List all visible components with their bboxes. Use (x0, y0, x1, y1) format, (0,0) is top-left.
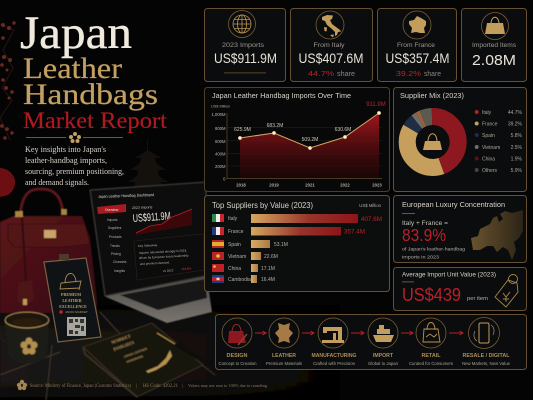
bar values: 16.4M (261, 277, 275, 283)
legend: Italy (482, 110, 492, 116)
legend: 44.7% (508, 110, 523, 116)
supplier names: France (228, 229, 244, 235)
title: Leather (23, 52, 122, 85)
intro text: sourcing, premium positioning, (25, 167, 124, 176)
laptop dashboard screen: Products (109, 235, 122, 239)
supplier names: Italy (228, 216, 238, 222)
bar values: 357.4M (344, 230, 365, 236)
footer: | (136, 384, 137, 389)
panel: from France: From France (397, 42, 436, 49)
supplier names: China (228, 266, 241, 272)
step: resale: RESALE / DIGITAL (462, 353, 510, 359)
legend: Others (482, 168, 498, 174)
intro text: Key insights into Japan's (25, 145, 106, 154)
panel: from Italy: US$407.6M (298, 51, 364, 66)
line chart (212, 102, 386, 188)
icon: handbag (482, 12, 508, 40)
step: retail: RETAIL (422, 353, 441, 359)
legend: Vietnam (482, 145, 500, 151)
panel: from Italy: From Italy (314, 42, 346, 49)
step: import: Global to Japan (368, 361, 399, 366)
flags (212, 214, 224, 283)
panel: from France: US$357.4M (386, 51, 450, 66)
footer: Source: Ministry of Finance, Japan (Customs Statistics) (30, 384, 131, 389)
cherry blossom branch (0, 21, 16, 140)
panel: average unit value: per item (467, 296, 488, 302)
laptop dashboard screen: Suppliers (108, 226, 122, 230)
bar values: 53.1M (274, 242, 288, 248)
step: resale: New Markets, New Value (462, 361, 511, 366)
legend: 39.2% (508, 122, 523, 128)
icon: Italy map (316, 11, 344, 39)
panel: 2023 imports: US$911.9M (214, 51, 277, 66)
panel: imports over time: US$ Million (211, 104, 230, 108)
step: design: DESIGN (226, 353, 248, 359)
intro text: leather-handbag imports, (25, 156, 107, 165)
coffee cup (0, 312, 49, 364)
bar values: 17.1M (261, 266, 275, 272)
intro text (25, 145, 124, 187)
footer: Values may not sum to 100% due to rounding. (188, 383, 268, 388)
laptop dashboard screen: Japan Leather Handbag Dashboard (98, 192, 154, 199)
red sun (0, 168, 15, 197)
step: manufacturing: MANUFACTURING (312, 353, 356, 359)
panel: supplier mix (394, 88, 526, 192)
supplier names: Spain (228, 242, 241, 248)
icon: France map (403, 11, 431, 39)
premium leather card: LEATHER (62, 298, 82, 303)
panel: top suppliers (204, 196, 390, 292)
line chart: 509.2M (302, 137, 318, 143)
line chart: 800M (215, 126, 226, 131)
heading: Japan Leather Handbag Imports Over Time (212, 91, 351, 100)
step: import: IMPORT (373, 353, 394, 359)
laptop dashboard screen: 2023 Imports (132, 205, 153, 210)
supplier names: Cambodia (228, 277, 251, 283)
bar values: 22.6M (264, 254, 278, 260)
line chart: 2021 (305, 182, 315, 188)
panel: from France: 39.2% (396, 69, 421, 78)
icon: globe (228, 10, 256, 38)
legend: 2.5% (511, 145, 523, 151)
panel: European concentration: Italy + France = (402, 220, 448, 227)
footer: | (182, 384, 183, 389)
line chart: 2022 (340, 182, 350, 188)
footer (17, 376, 350, 390)
step: design (218, 318, 257, 366)
line chart: 0 (223, 176, 226, 182)
supplier names: Vietnam (228, 254, 246, 260)
laptop dashboard screen: vs 2022 (163, 268, 174, 273)
laptop dashboard screen: Channels (113, 260, 127, 264)
panel: 2023 imports: 2023 Imports (222, 42, 264, 49)
line chart: 400M (215, 152, 226, 156)
arrow (401, 331, 413, 335)
arrow (302, 331, 314, 335)
heading: Average Import Unit Value (2023) (402, 272, 496, 278)
notebook and pen: HANDBAGS (126, 354, 144, 364)
panel: from Italy: share (337, 71, 355, 78)
panel: top suppliers: US$ Million (359, 203, 382, 208)
desk surface (0, 305, 340, 400)
arrow (351, 331, 364, 335)
footer: HS Code: 4202.21 (143, 384, 178, 389)
line chart: 2019 (269, 182, 279, 188)
donut chart (407, 116, 458, 168)
supplier names (228, 216, 251, 283)
legend: Spain (482, 133, 495, 139)
line chart: 1,000M (212, 112, 226, 117)
laptop dashboard screen: Pricing (111, 252, 121, 256)
step: resale (462, 318, 511, 366)
arrow (255, 331, 266, 335)
panel: average unit value (394, 268, 526, 310)
panel: from France (378, 8, 456, 82)
icon: donut center handbag (423, 134, 442, 150)
line chart: 911.9M (366, 102, 386, 108)
bar chart (251, 214, 358, 283)
big stat: US$439 (402, 284, 461, 305)
laptop dashboard screen (97, 192, 204, 280)
laptop dashboard screen: driven by European luxury leadership (139, 253, 189, 260)
panel: from France: share (424, 71, 441, 78)
panel: European concentration: of Japan's leather-handbag (402, 246, 465, 252)
laptop dashboard screen: Key Takeaway (138, 243, 158, 248)
title (20, 7, 168, 133)
laptop (90, 182, 212, 323)
notebook and pen: INSIGHTS (113, 340, 135, 352)
line chart: 600M (215, 139, 226, 144)
big stat: 83.9% (402, 225, 446, 245)
legend: 5.8% (511, 133, 523, 139)
title: Handbags (23, 78, 158, 111)
step: import (368, 318, 399, 366)
line chart: 683.2M (267, 123, 283, 129)
laptop dashboard screen: Imports rebounded strongly in 2023, (139, 248, 187, 255)
laptop dashboard screen: +44.6% (181, 266, 192, 271)
panel: European concentration (394, 196, 526, 262)
handbag photo (0, 189, 97, 313)
heading: Supplier Mix (2023) (400, 93, 464, 100)
notebook and pen: MARKET (111, 333, 131, 345)
heading: Top Suppliers by Value (2023) (212, 201, 313, 210)
laptop dashboard screen: Trends (110, 244, 120, 248)
step: design: Concept to Creation (218, 361, 257, 366)
icon: Europe map (471, 210, 523, 260)
premium leather card: EXCELLENCE (59, 304, 87, 309)
premium leather card (44, 254, 101, 342)
heading: European Luxury Concentration (402, 202, 505, 209)
panel: imported items: Imported Items (472, 42, 516, 49)
step: leather: Premium Materials (266, 361, 302, 366)
legend: 1.9% (511, 156, 523, 162)
line chart: 630.6M (335, 127, 351, 133)
title divider with flower (26, 132, 123, 143)
line chart: 2023 (372, 182, 382, 188)
legend (475, 110, 523, 174)
laptop dashboard screen: and premium demand. (140, 260, 170, 266)
bar values: 407.6M (361, 217, 382, 223)
intro text: and demand signals. (25, 178, 89, 187)
panel: from Italy (290, 8, 372, 82)
line chart: 2018 (236, 182, 246, 188)
line chart: 200M (215, 164, 226, 169)
premium leather card: JAPAN MARKET (65, 310, 88, 314)
panel: 2023 imports (204, 8, 286, 82)
laptop dashboard screen: Overview (105, 208, 119, 212)
laptop dashboard screen: Insights (114, 269, 125, 273)
title: Market Report (23, 108, 168, 133)
laptop dashboard screen: US$911.9M (132, 210, 171, 225)
step: leather (266, 318, 302, 366)
panel: imported items (462, 8, 526, 82)
step: manufacturing (312, 318, 356, 366)
notebook and pen (83, 323, 207, 397)
notebook and pen: JAPAN LEATHER (123, 346, 148, 359)
step: retail: Curated for Consumers (409, 361, 453, 366)
title: Japan (20, 7, 132, 59)
bar values (261, 217, 382, 283)
laptop dashboard screen: Imports (107, 218, 118, 222)
step: manufacturing: Crafted with Precision (313, 361, 356, 366)
arrow (449, 331, 463, 335)
panel: imported items: 2.08M (472, 52, 516, 69)
pagoda silhouette (128, 140, 168, 190)
legend: China (482, 156, 495, 162)
panel: European concentration: imports in 2023 (402, 254, 439, 260)
panel: value chain (216, 314, 526, 370)
panel: imports over time (204, 88, 390, 192)
icon: price tag (495, 274, 518, 307)
step: leather: LEATHER (272, 353, 296, 359)
line chart: 625.9M (234, 127, 251, 133)
legend: France (482, 122, 498, 128)
legend: 5.9% (511, 168, 523, 174)
step: retail (409, 318, 453, 366)
premium leather card: PREMIUM (61, 292, 81, 297)
panel: from Italy: 44.7% (308, 69, 334, 78)
